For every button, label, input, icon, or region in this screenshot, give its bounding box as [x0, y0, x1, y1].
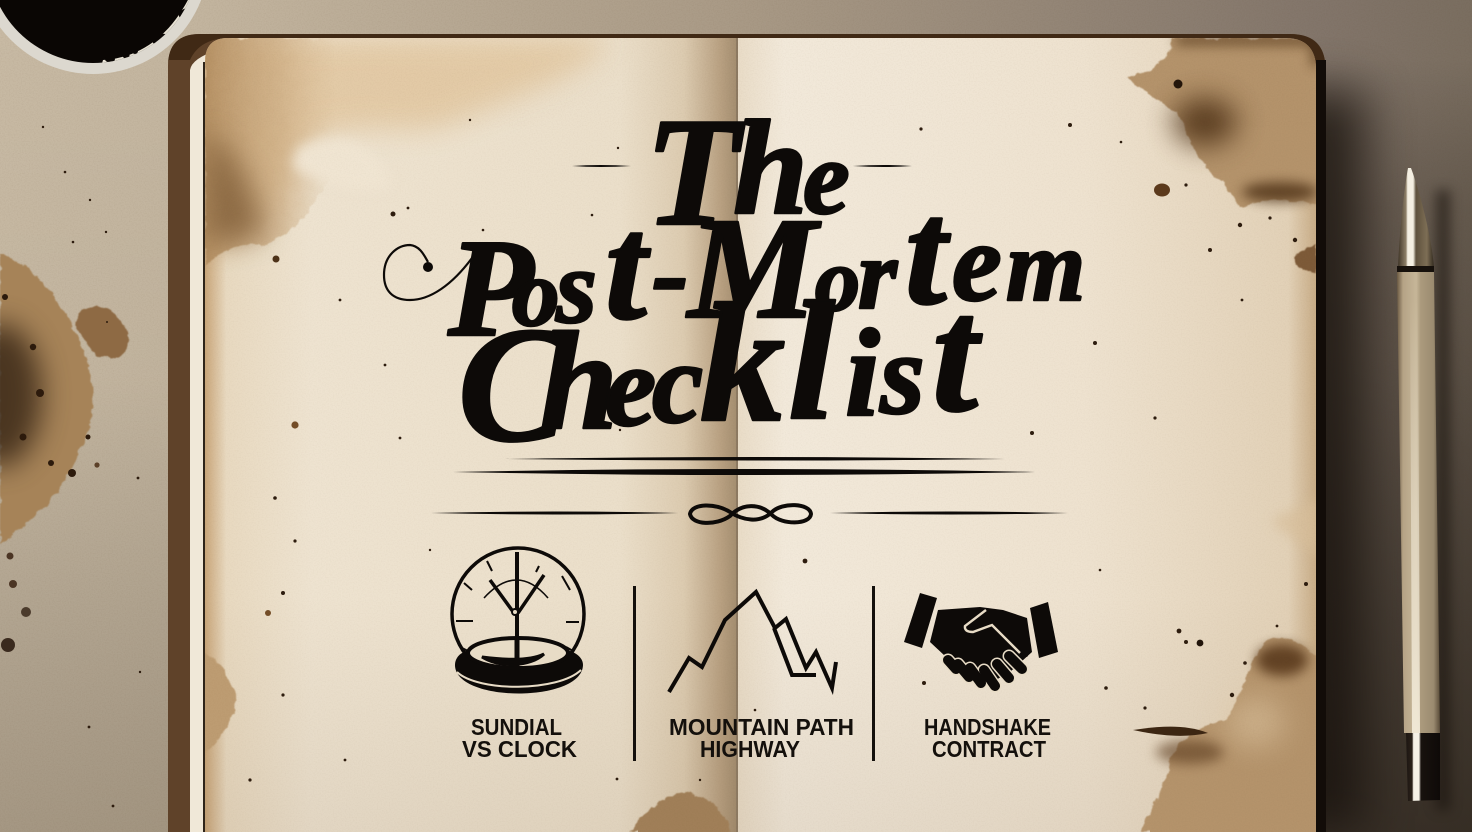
flourish on the P: [384, 245, 472, 300]
title line: Checklist: i: [845, 305, 880, 443]
label: sundial vs clock: SUNDIAL: [471, 714, 562, 740]
page grain: [205, 38, 1317, 832]
coffee cup: [0, 0, 210, 74]
decorative rule beside The (right): [853, 165, 912, 167]
title line: Post-Mortem: r: [858, 219, 898, 330]
label: handshake contract: CONTRACT: [932, 736, 1046, 762]
title line: Checklist: l: [788, 267, 835, 455]
label: mountain path highway: MOUNTAIN PATH: [669, 714, 854, 740]
title line: Post-Mortem: -: [652, 212, 689, 334]
title line: Post-Mortem: t: [605, 185, 651, 351]
flourish divider: [431, 505, 1068, 523]
title line: Post-Mortem: s: [555, 228, 597, 345]
title line: The: e: [803, 119, 850, 236]
title line: Post-Mortem: m: [1006, 210, 1085, 323]
title line: Post-Mortem: o: [815, 231, 860, 330]
icon: sundial vs clock: [452, 548, 584, 694]
ink splatter: [42, 119, 1308, 807]
label: sundial vs clock: [462, 714, 577, 762]
stain: right faint: [1275, 506, 1316, 548]
stain: top left: [205, 38, 610, 264]
stain: bottom right: [1133, 638, 1320, 832]
icon: mountain path highway: [669, 592, 836, 692]
label: mountain path highway: HIGHWAY: [700, 736, 800, 762]
title line: Checklist: e: [605, 323, 656, 450]
title: The Post-Mortem Checklist: [384, 86, 1085, 476]
label: sundial vs clock: VS CLOCK: [462, 736, 577, 762]
coffee stain on desk: [0, 254, 129, 652]
title line: Checklist: C: [458, 293, 570, 476]
double rule under title: [453, 457, 1035, 475]
title line: Post-Mortem: t: [905, 170, 951, 336]
title line: Post-Mortem: P: [447, 211, 535, 366]
pages: [200, 38, 1320, 832]
label: handshake contract: [924, 714, 1051, 762]
label: mountain path highway: [669, 714, 854, 762]
title line: Post-Mortem: e: [952, 201, 1002, 325]
title line: The: h: [733, 94, 808, 243]
divider: [872, 586, 875, 761]
title line: The: T: [645, 86, 745, 258]
title line: Checklist: s: [879, 311, 925, 438]
title line: Checklist: t: [932, 263, 982, 446]
icon: handshake: [904, 593, 1058, 686]
title line: Post-Mortem: M: [686, 189, 821, 349]
pen: [1397, 168, 1440, 801]
title line: Post-Mortem: o: [512, 240, 560, 346]
decorative rule beside The (left): [572, 165, 631, 167]
page edges: [190, 50, 218, 832]
stain: top right: [1128, 38, 1320, 273]
stain: left edge: [205, 654, 237, 750]
title line: Checklist: c: [652, 320, 703, 447]
title line: Checklist: h: [540, 304, 618, 459]
notebook: [168, 34, 1326, 832]
divider: [633, 586, 636, 761]
stain: bottom centre: [630, 793, 731, 832]
title line: Checklist: k: [700, 269, 785, 457]
label: handshake contract: HANDSHAKE: [924, 714, 1051, 740]
notebook cover: [168, 34, 1326, 832]
